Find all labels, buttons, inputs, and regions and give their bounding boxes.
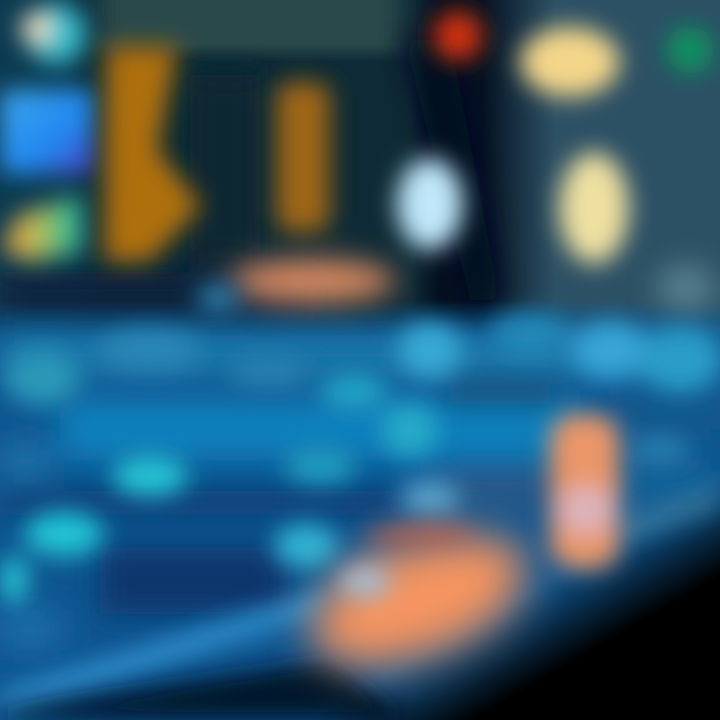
background: upper area: [0, 0, 720, 340]
orange glow large: [310, 537, 525, 666]
red light: [433, 11, 483, 61]
water tonal bands: [0, 335, 720, 650]
dark lower left edge: [0, 660, 410, 720]
orange glow on floor: [228, 259, 396, 303]
water highlights: [0, 284, 720, 604]
icon: rainbow panel: [0, 195, 84, 262]
black lower right corner: [0, 420, 720, 720]
cream lamp upper: [520, 27, 620, 97]
pale blue orb: [397, 158, 463, 250]
cream lamp lower: [559, 152, 629, 264]
orange glow details: [339, 527, 476, 598]
background: top band: [100, 0, 400, 62]
background: upper details: [0, 40, 500, 322]
green light: [666, 26, 714, 74]
grey blur at right edge: [656, 264, 716, 312]
icon: round teal and cream orb: [21, 4, 86, 64]
amber column middle: [276, 82, 330, 232]
background: water field: [0, 300, 720, 720]
diagonal beam right: [620, 488, 720, 542]
amber column left: [104, 46, 202, 262]
orange glow vertical: [550, 414, 620, 569]
icon: blue panel: [0, 90, 94, 174]
diagonal light beam: [0, 588, 330, 716]
